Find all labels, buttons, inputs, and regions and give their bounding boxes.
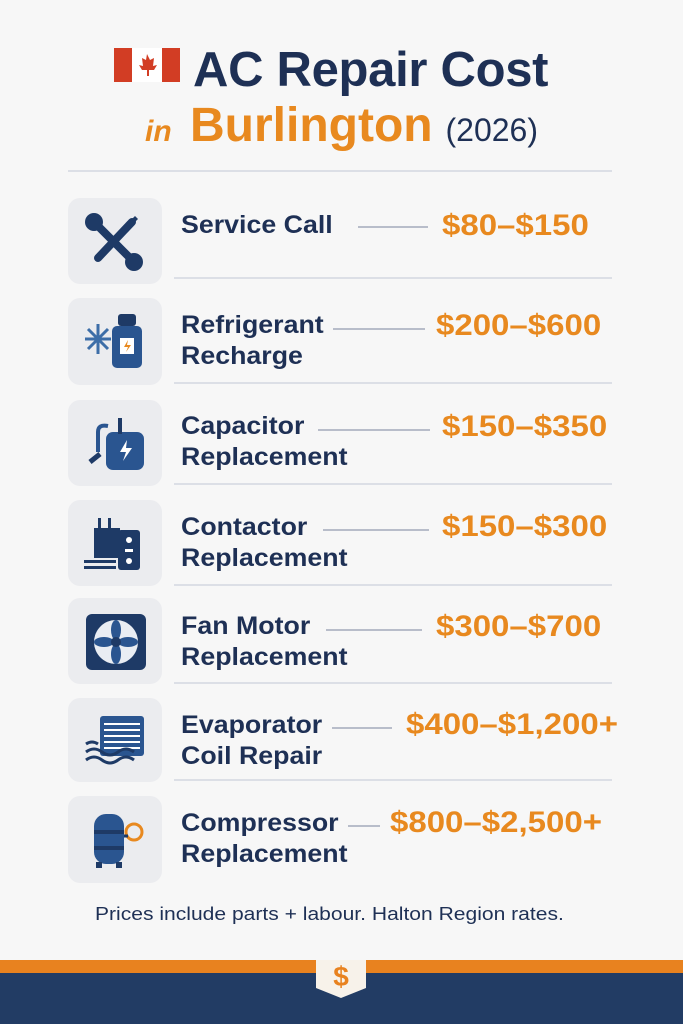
title (114, 43, 548, 152)
footer band (0, 960, 683, 1024)
row: fan motor: Fan Motor (181, 612, 310, 640)
row: capacitor: Replacement (181, 443, 348, 471)
row: evaporator: Coil Repair (181, 742, 322, 770)
row: compressor: Replacement (181, 840, 348, 868)
icon: coil (68, 698, 162, 782)
row: capacitor: $150–$350 (442, 410, 607, 443)
icon: dollar badge (316, 960, 366, 998)
row: fan motor (68, 598, 601, 684)
icon: compressor (68, 796, 162, 883)
icon: tools (68, 198, 162, 284)
row: evaporator (68, 698, 618, 782)
row: service call (68, 198, 589, 284)
row: evaporator: Evaporator (181, 711, 322, 739)
row: compressor (68, 796, 602, 883)
row: service call: Service Call (181, 211, 333, 239)
row: fan motor: $300–$700 (436, 610, 601, 643)
footnote: Prices include parts + labour. Halton Region rates. (95, 904, 564, 924)
icon: canada flag (114, 48, 180, 82)
row: refrigerant: Refrigerant (181, 311, 324, 339)
row: contactor: Replacement (181, 544, 348, 572)
row: capacitor (68, 400, 607, 486)
row: refrigerant: Recharge (181, 342, 303, 370)
title: AC Repair Cost (193, 43, 548, 97)
row: contactor: $150–$300 (442, 510, 607, 543)
row: refrigerant: $200–$600 (436, 309, 601, 342)
row: fan motor: Replacement (181, 643, 348, 671)
row: contactor (68, 500, 607, 586)
row: service call: $80–$150 (442, 209, 589, 242)
row: compressor: Compressor (181, 809, 339, 837)
icon: capacitor (68, 400, 162, 486)
icon: dollar badge: $ (333, 961, 349, 992)
row: capacitor: Capacitor (181, 412, 304, 440)
icon: fan (68, 598, 162, 684)
title: in Burlington (2026) (145, 99, 538, 152)
icon: contactor (68, 500, 162, 586)
row: refrigerant (68, 298, 601, 385)
row: contactor: Contactor (181, 513, 307, 541)
icon: refrigerant (68, 298, 162, 385)
row: compressor: $800–$2,500+ (390, 806, 602, 839)
row: evaporator: $400–$1,200+ (406, 708, 618, 741)
